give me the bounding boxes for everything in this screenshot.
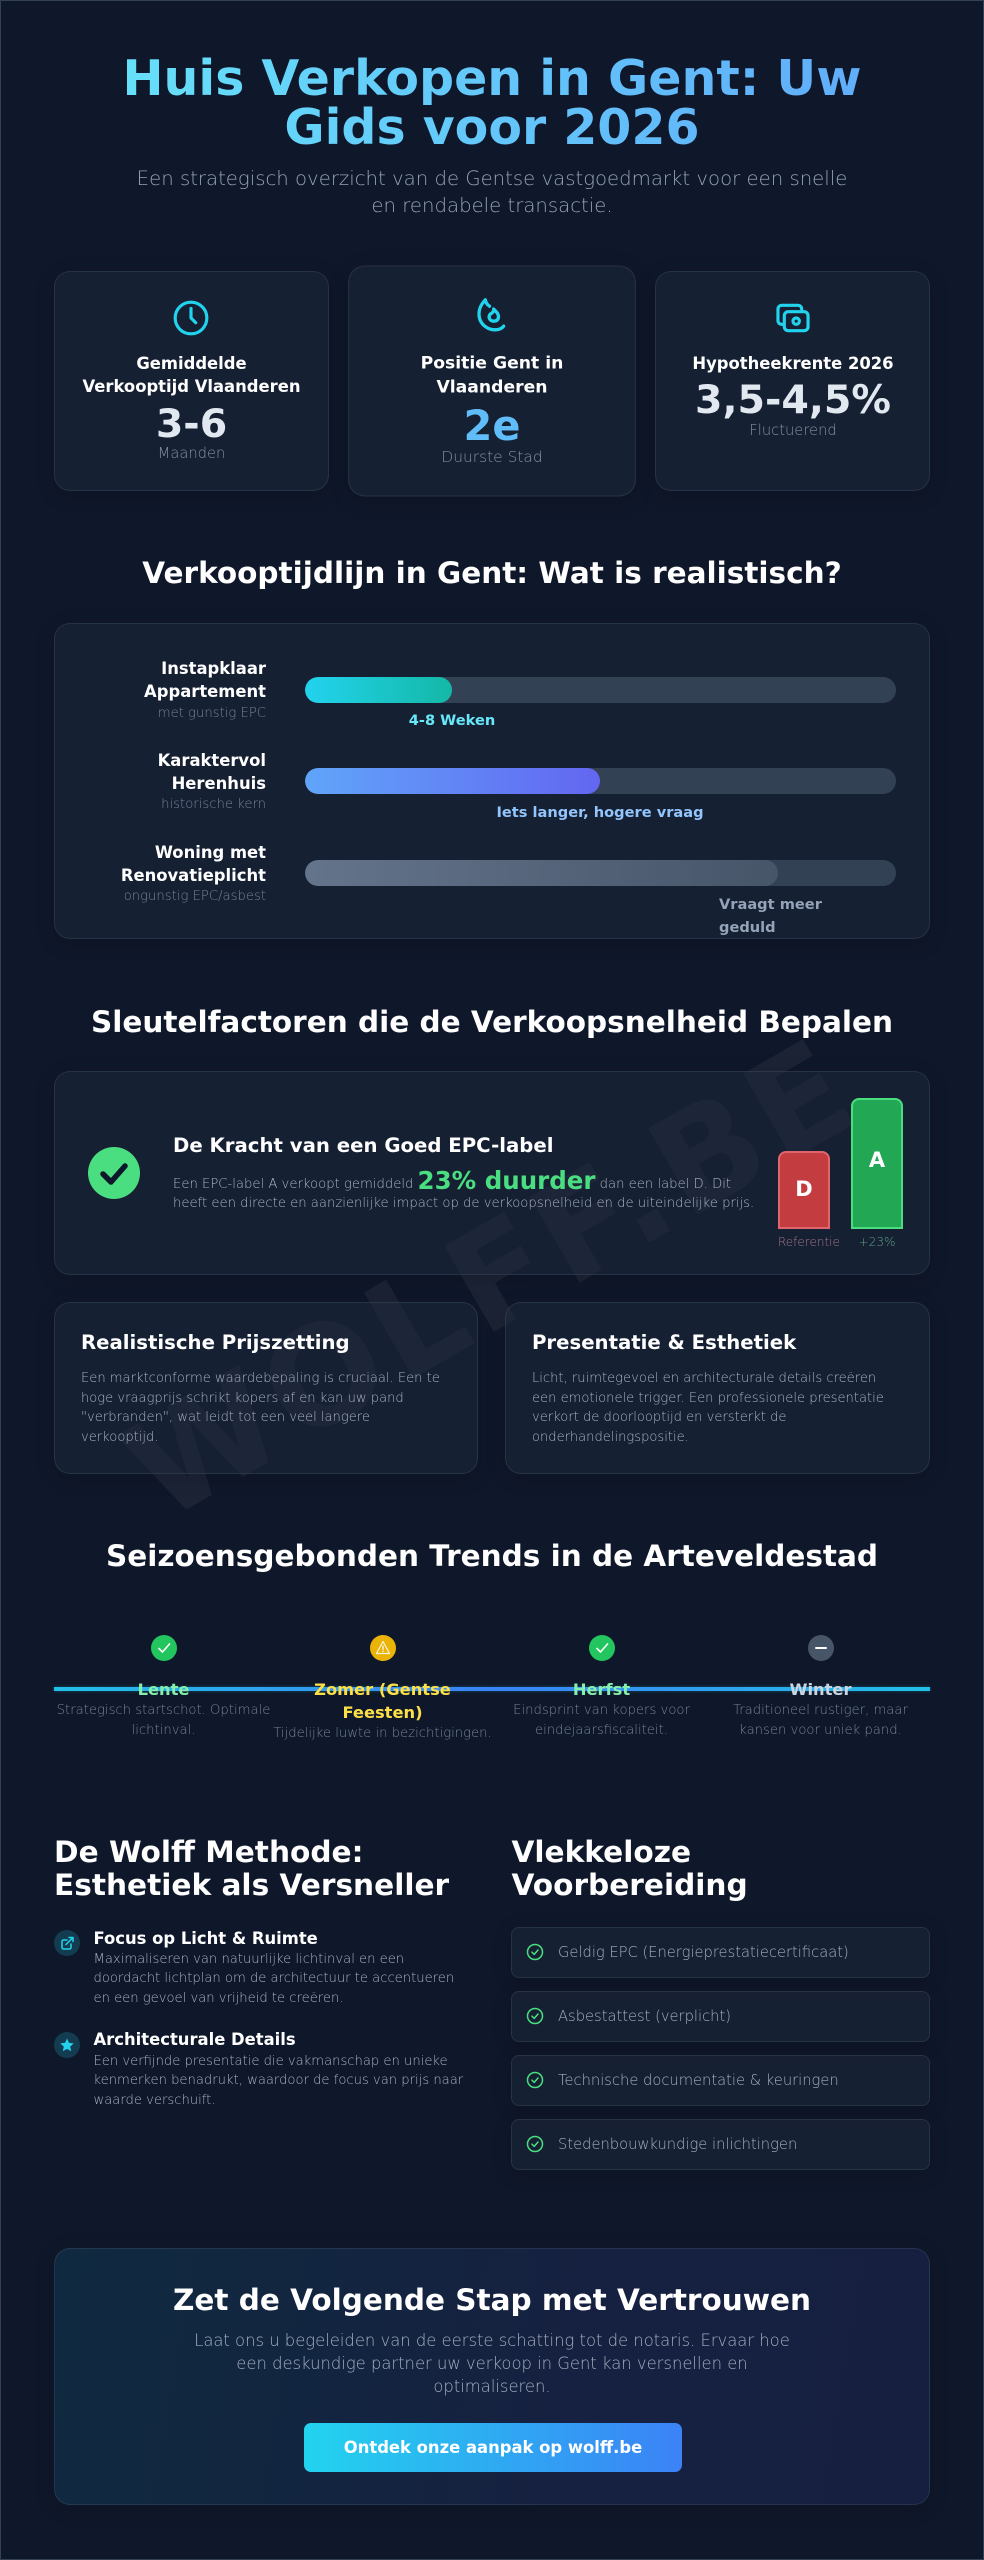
heading: sleutelfactoren: Sleutelfactoren die de Verkoopsnelheid Bepalen [91,1005,893,1039]
checklist text: Geldig EPC (Energieprestatiecertificaat) [558,1944,849,1961]
cta button [304,2423,682,2472]
bar caption: 4-8 Weken [409,712,495,729]
heading: vlekkeloze voorbereiding: Vlekkeloze [512,1835,691,1869]
season name: Feesten) [342,1703,423,1722]
bar [305,677,896,703]
season text: lichtinval. [132,1723,195,1738]
item text: Maximaliseren van natuurlijke lichtinval en een [94,1952,404,1966]
bar caption D: Referentie [778,1235,840,1249]
row: karaktervol herenhuis [158,751,896,821]
panel: stat positie [348,266,636,496]
season: winter [733,1635,908,1738]
panel: stat hypotheekrente [655,271,930,491]
row label [144,659,266,701]
stat heading: Vlaanderen [436,377,548,397]
method item: architecturale details [54,2030,464,2108]
icon: check circle [88,1147,140,1199]
season name [314,1680,451,1722]
icon: clock [174,300,208,336]
season text: eindejaarsfiscaliteit. [535,1723,668,1738]
item text: waarde verschuift. [94,2093,216,2108]
card text: onderhandelingspositie. [532,1430,689,1445]
heading: de wolff methode: Esthetiek als Versneller [54,1868,449,1902]
season text [513,1703,690,1738]
icon: check circle [526,1944,544,1960]
watermark: WOLFF.BE [100,1008,884,1552]
row label: Appartement [144,682,266,701]
row note: met gunstig EPC [158,706,266,721]
subtitle: en rendabele transactie. [371,194,613,217]
bar [305,768,896,794]
cta button: Ontdek onze aanpak op wolff.be [344,2438,642,2457]
cta text: een deskundige partner uw verkoop in Gent kan versnellen en [236,2354,748,2373]
checklist text: Stedenbouwkundige inlichtingen [558,2136,797,2153]
card title: De Kracht van een Goed EPC-label [173,1134,553,1157]
stat note: Duurste Stad [441,448,543,466]
checklist item: stedenbouw [511,2119,930,2170]
checklist item: documentatie [511,2055,930,2106]
card text: een emotionele trigger. Een professionele presentatie [532,1391,884,1406]
season name: Winter [790,1680,852,1699]
icon: check [589,1635,615,1661]
season: herfst [513,1635,690,1738]
icon: check circle [526,2072,544,2088]
season name: Zomer (Gentse [314,1680,451,1699]
card text: Een marktconforme waardebepaling is cruciaal. Een te [81,1371,440,1386]
stat note: Fluctuerend [749,422,837,439]
panel: stat verkooptijd [54,271,329,491]
bar: label D: D [795,1177,813,1201]
item text: kenmerken benadrukt, waardoor de focus van prijs naar [94,2073,463,2088]
panel: call to action [54,2248,930,2505]
icon: check circle [526,2008,544,2024]
cta text [55,2329,929,2398]
row label: Karaktervol [158,751,266,770]
cta heading: Zet de Volgende Stap met Vertrouwen [173,2283,811,2317]
panel: realistische prijszetting [54,1302,478,1474]
card text: Licht, ruimtegevoel en architecturale details creëren [532,1371,876,1386]
checklist text: Asbestattest (verplicht) [558,2008,731,2025]
cta text: optimaliseren. [433,2377,551,2396]
card text: Een EPC-label A verkoopt gemiddeld 23% duurder dan een label D. Dit [173,1166,731,1195]
season text [57,1703,270,1738]
stat value: 2e [464,402,520,450]
item title: Focus op Licht & Ruimte [94,1929,318,1948]
bar caption: geduld [719,919,776,936]
card text: hoge vraagprijs schrikt kopers af en kan uw pand [81,1391,404,1406]
season text: Traditioneel rustiger, maar [733,1703,908,1718]
panel: epc label [54,1071,930,1275]
panel: timeline bars [54,623,930,939]
icon: banknotes [776,304,810,332]
checklist item: epc [511,1927,930,1978]
title [0,54,984,152]
heading: de wolff methode: De Wolff Methode: [54,1835,363,1869]
card text [532,1371,884,1445]
title: Gids voor 2026 [284,99,700,156]
row note: ongunstig EPC/asbest [124,889,266,904]
heading: vlekkeloze voorbereiding [512,1835,748,1902]
item text: en een gevoel van vrijheid te creëren. [94,1991,344,2006]
stat heading: Verkooptijd Vlaanderen [82,377,301,396]
card text: verkort de doorlooptijd en versterkt de [532,1410,786,1425]
item text [94,1952,454,2006]
subtitle: Een strategisch overzicht van de Gentse vastgoedmarkt voor een snelle [137,167,847,190]
row label: Woning met [155,843,266,862]
card text [81,1371,440,1445]
row: renovatieplicht [121,843,896,936]
heading: verkooptijdlijn: Verkooptijdlijn in Gent: Wat is realistisch? [142,556,842,590]
bar caption A: +23% [859,1235,895,1249]
heading: vlekkeloze voorbereiding: Voorbereiding [512,1868,748,1902]
icon: check circle [526,2135,544,2153]
title: Huis Verkopen in Gent: Uw [123,50,861,107]
method item: licht en ruimte [54,1929,454,2006]
bar: label A [851,1098,903,1229]
icon: check [151,1635,177,1661]
panel: presentatie en esthetiek [505,1302,930,1474]
season name: Lente [138,1680,189,1699]
item text [94,2054,464,2108]
icon: external link [54,1930,80,1956]
bar: label A: A [869,1148,885,1172]
cta text: Laat ons u begeleiden van de eerste schatting tot de notaris. Ervaar hoe [194,2331,790,2350]
icon: flame [477,298,506,332]
season text: Tijdelijke luwte in bezichtigingen. [273,1726,492,1741]
season text [733,1703,908,1738]
heading: de wolff methode [54,1835,449,1902]
row label: Herenhuis [172,774,266,793]
season text: kansen voor uniek pand. [739,1723,902,1738]
bar: label D [778,1151,830,1229]
item title: Architecturale Details [94,2030,296,2049]
row label: Renovatieplicht [121,866,266,885]
stat heading [421,353,563,397]
row label [158,751,266,793]
checklist item: asbest [511,1991,930,2042]
season text: Eindsprint van kopers voor [513,1703,690,1718]
row label [121,843,266,885]
stat note: Maanden [158,445,225,462]
stat heading [82,354,301,396]
stat value: 3-6 [156,401,227,447]
row: instapklaar appartement [144,659,896,729]
season: zomer [273,1635,492,1741]
stat heading: Gemiddelde [136,354,247,373]
bar caption [719,896,822,936]
card text [173,1166,754,1211]
bar [305,860,896,886]
card text: heeft een directe en aanzienlijke impact op de verkoopsnelheid en de uiteindelijke prijs. [173,1196,754,1211]
stat heading: Hypotheekrente 2026 [692,354,894,373]
stat value: 3,5-4,5% [695,377,891,423]
season name: Herfst [573,1680,630,1699]
bar caption: Iets langer, hogere vraag [496,804,704,821]
stat heading: Positie Gent in [421,353,563,373]
subtitle [137,167,847,217]
season: lente [57,1635,270,1738]
card text: verkooptijd. [81,1430,159,1445]
row note: historische kern [161,797,266,812]
item text: doordacht lichtplan om de architectuur te accentueren [94,1971,454,1986]
icon: star [54,2032,80,2058]
heading: seizoenen: Seizoensgebonden Trends in de Arteveldestad [106,1539,878,1573]
checklist text: Technische documentatie & keuringen [558,2072,839,2089]
card title: Realistische Prijszetting [81,1331,350,1354]
icon: minus [808,1635,834,1661]
bar caption: Vraagt meer [719,896,822,913]
row label: Instapklaar [161,659,266,678]
card text: "verbranden", wat leidt tot een veel langere [81,1410,370,1425]
item text: Een verfijnde presentatie die vakmanschap en unieke [94,2054,448,2068]
timeline line [54,1687,930,1691]
icon: warning [370,1635,396,1661]
card title: Presentatie & Esthetiek [532,1331,796,1354]
season text: Strategisch startschot. Optimale [57,1703,270,1718]
